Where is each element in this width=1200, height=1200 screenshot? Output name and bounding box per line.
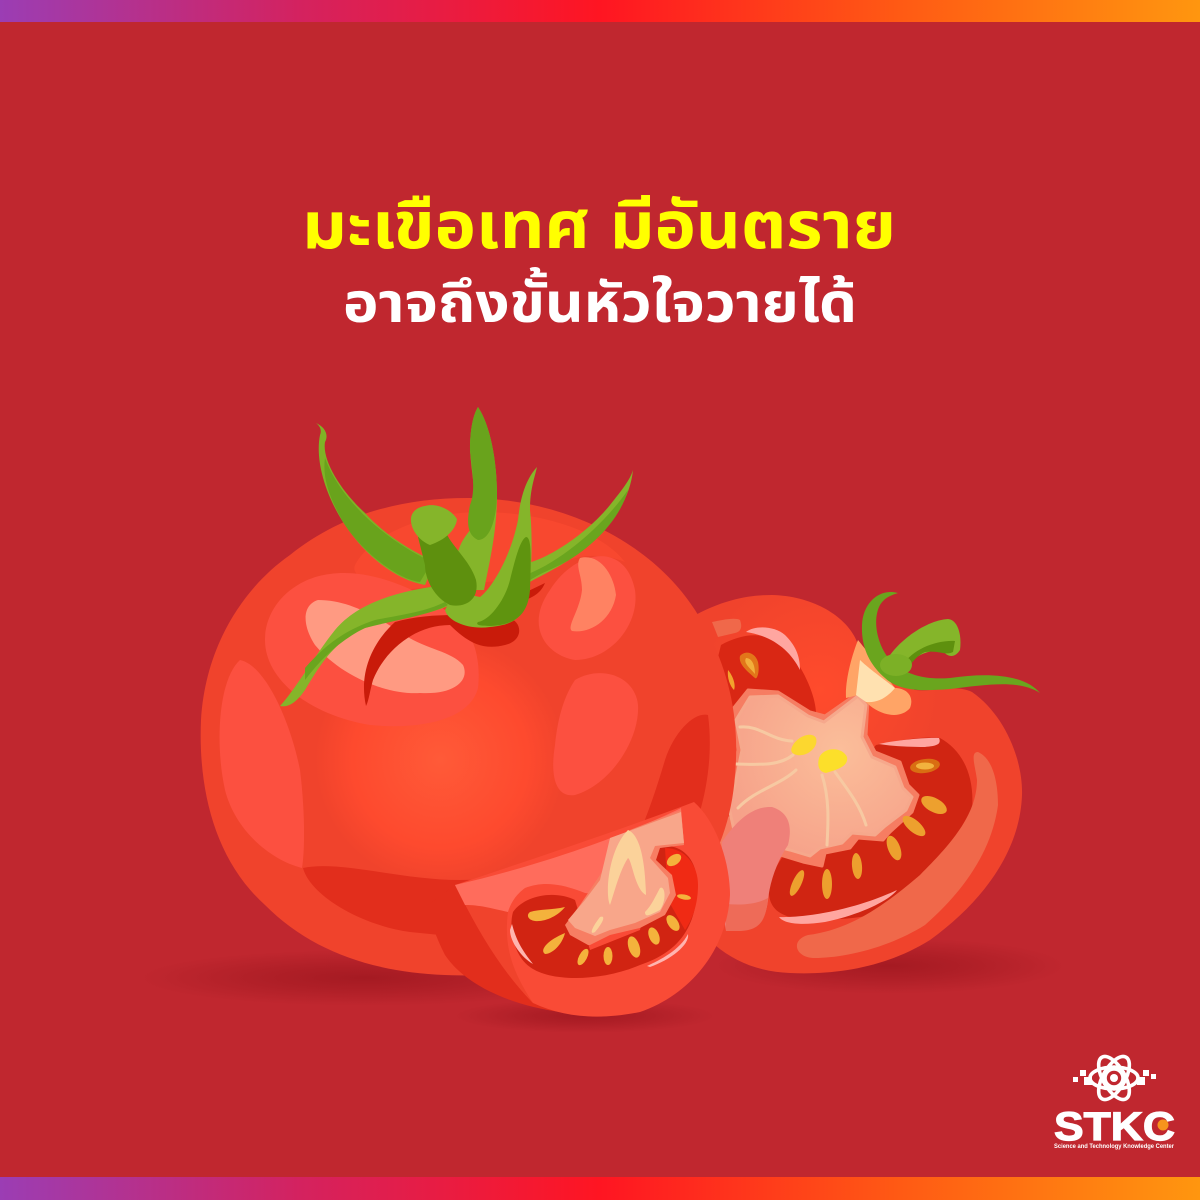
seed 7 [664, 913, 682, 933]
seed inner [745, 658, 755, 674]
top gradient bar [0, 0, 1200, 22]
seed 3 [575, 947, 591, 967]
seed 6 [822, 869, 832, 899]
sepal: centre dark [468, 407, 497, 540]
wedge cavity [511, 846, 697, 978]
STKC logo [1054, 1052, 1175, 1150]
tomato wedge [428, 802, 730, 1017]
lower right shade [595, 715, 710, 901]
seed 7 [787, 868, 807, 898]
sepal: right dark edge [525, 490, 628, 585]
half tomato [690, 592, 1040, 973]
curl [862, 592, 1040, 693]
shadow: half tomato [715, 938, 1065, 994]
title [302, 188, 896, 334]
skin [201, 498, 736, 976]
seed 4 [884, 834, 904, 862]
shadow: whole tomato [140, 950, 590, 1006]
ground shadows [140, 938, 1065, 1033]
peach highlight left [306, 600, 465, 693]
right upper highlight [539, 556, 636, 660]
yellow core left [791, 735, 816, 755]
seed 4 [604, 947, 612, 965]
seed 1 [528, 907, 565, 921]
sepal: front [445, 467, 537, 628]
wedge dark side [428, 885, 560, 1012]
top glow patch [354, 512, 625, 590]
pixel [1143, 1070, 1149, 1076]
logo pixels left [1073, 1070, 1092, 1085]
wedge seeds [528, 851, 691, 967]
vein bottom [592, 917, 603, 933]
seeds: lower cavity [787, 757, 950, 899]
wedge glare left [510, 924, 533, 964]
seed 5 [851, 853, 863, 879]
title line 2: อาจถึงขั้นหัวใจวายได้ [343, 266, 857, 334]
atom orbit 3 [1092, 1052, 1136, 1104]
sepal: lower left dark edge [305, 602, 448, 680]
lower cavity [769, 737, 972, 919]
seed 8 [677, 893, 691, 901]
left cavity sliver [715, 815, 740, 842]
wedge cavity bright [665, 848, 698, 930]
wedge pulp [568, 812, 684, 936]
seed ring [740, 653, 759, 678]
sepal shadow [364, 615, 519, 706]
logo pixels right [1137, 1070, 1156, 1085]
wedge inner shade [462, 898, 533, 1003]
pulp rim [720, 690, 918, 895]
seed 2 [543, 933, 565, 954]
vein 2 [736, 755, 793, 764]
vein 4 [822, 775, 828, 845]
seeds: upper cavity [728, 653, 759, 690]
sepal: centre [455, 407, 497, 590]
atom ring [1105, 1069, 1123, 1087]
vein left [608, 830, 646, 905]
atom orbit 1 [1090, 1067, 1138, 1089]
sepal: upper left [316, 423, 435, 585]
seed 1 inner [916, 762, 934, 770]
whole tomato [201, 407, 736, 976]
rim band [797, 752, 998, 958]
glare: top [746, 627, 800, 670]
pixel [1137, 1077, 1145, 1085]
upper cavity [700, 635, 816, 730]
pulp [726, 696, 912, 880]
logo wordmark: STKC [1054, 1105, 1175, 1149]
sepal: right [520, 470, 633, 585]
stem shadow [903, 641, 955, 668]
atom nucleus [1110, 1074, 1118, 1082]
glare: right [879, 738, 940, 747]
sepal: upper left dark [324, 458, 432, 582]
lower left shade [303, 866, 520, 935]
wedge cut face [455, 808, 684, 912]
top left rim band [712, 619, 741, 637]
wedge glare right [647, 934, 688, 967]
pink pulp overlay [722, 807, 790, 931]
sepal: front dark [477, 537, 531, 626]
logo tagline: Science and Technology Knowledge Center [1054, 1144, 1175, 1150]
seed 9 [665, 851, 683, 869]
sepal shadow right [520, 583, 545, 600]
seed 3 [899, 812, 929, 840]
vein 5 [835, 772, 866, 825]
wedge pulp rim [565, 810, 684, 945]
calyx [280, 407, 633, 706]
seed 6 [646, 926, 662, 946]
pixel [1073, 1077, 1078, 1082]
seed 5 [625, 935, 643, 959]
half tomato stem [862, 592, 1040, 693]
sepal: lower left [280, 585, 450, 706]
right lower highlight [553, 673, 638, 795]
wedge pulp veins [592, 830, 665, 933]
stem top [890, 619, 960, 672]
stem top [411, 505, 457, 545]
seed 1 [909, 757, 941, 775]
vein 1 [740, 727, 792, 741]
pink pulp lower [726, 898, 768, 931]
bottom gradient bar [0, 1177, 1200, 1200]
pulp veins [736, 727, 866, 845]
stem attachment [846, 640, 911, 715]
logo atom icon [1090, 1052, 1138, 1104]
seed 2 [918, 792, 950, 818]
stem core [856, 660, 895, 702]
peach highlight right [571, 557, 616, 631]
pixel [1084, 1077, 1092, 1085]
logo orange dot [1158, 1120, 1168, 1130]
upper left highlight [265, 573, 479, 726]
seed side [728, 670, 735, 690]
wedge flesh [455, 802, 730, 1017]
yellow core right [818, 749, 847, 773]
atom orbit 2 [1092, 1052, 1136, 1104]
pixel [1151, 1074, 1156, 1079]
stem knob [880, 654, 912, 676]
vein right [645, 888, 665, 915]
glare: bottom [779, 890, 897, 924]
stem side [418, 530, 477, 606]
left side highlight [220, 660, 304, 868]
title line 1: มะเขือเทศ มีอันตราย [302, 188, 896, 262]
half tomato skin [690, 595, 1022, 973]
vein 3 [738, 770, 796, 808]
pixel [1080, 1070, 1086, 1076]
shadow: wedge [455, 999, 715, 1033]
